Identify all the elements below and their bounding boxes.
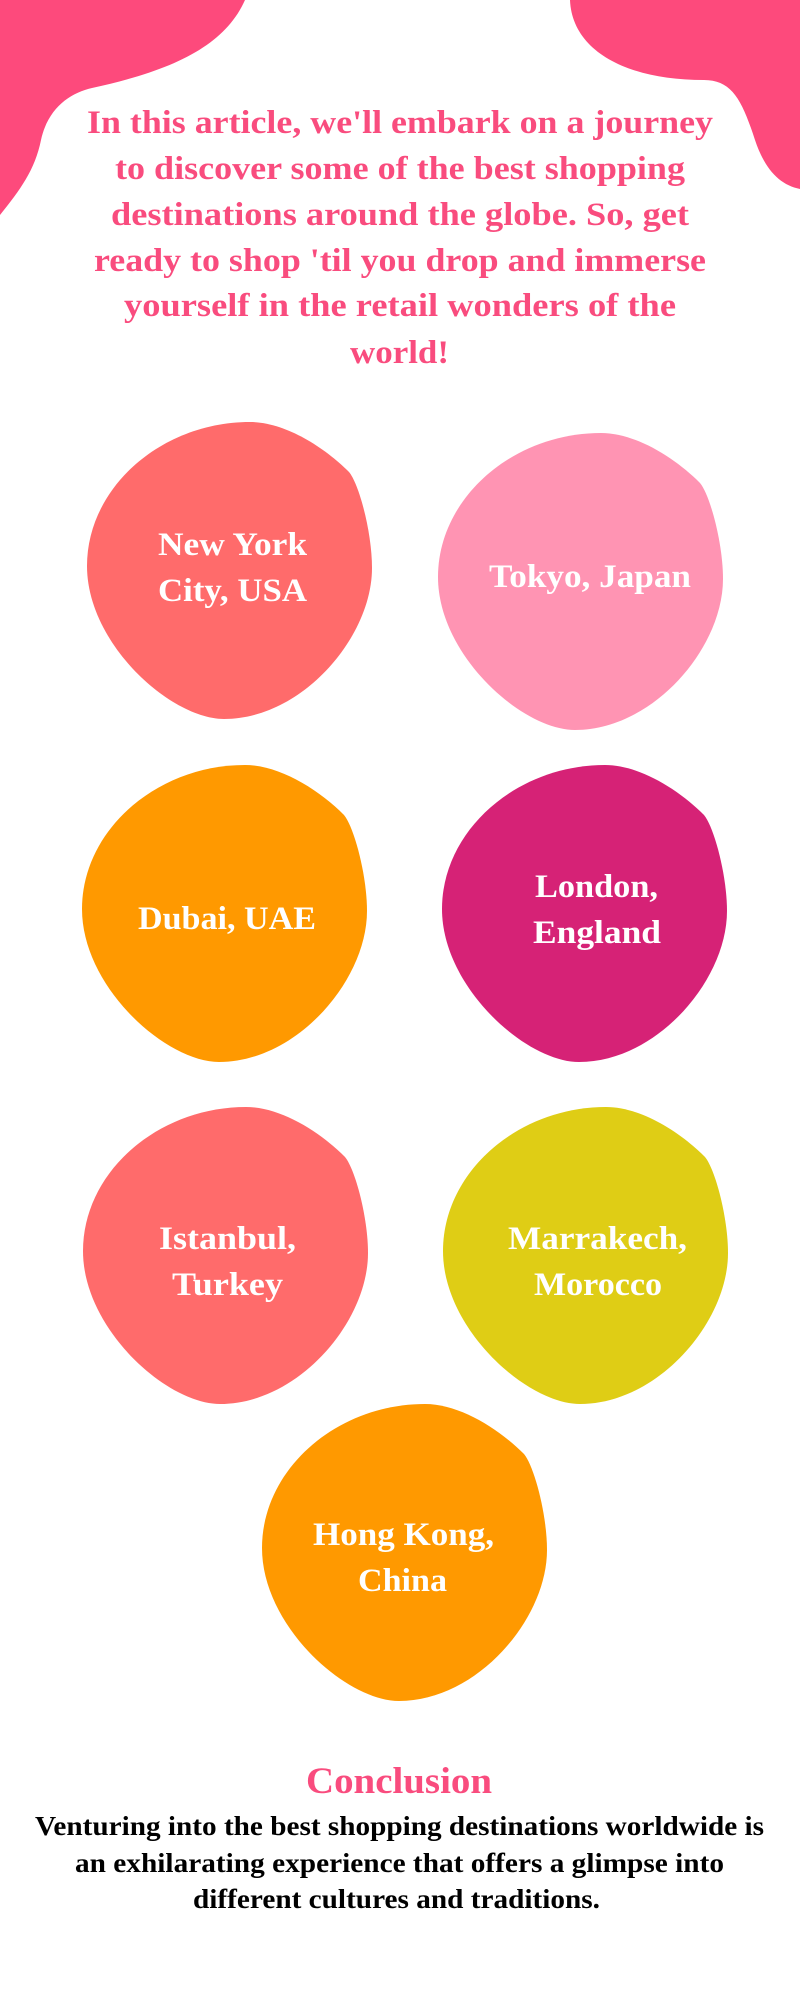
decorative blob: top right corner bbox=[570, 0, 800, 189]
intro paragraph: to discover some of the best shopping bbox=[115, 151, 686, 187]
panel: Hong Kong, China bbox=[262, 1404, 547, 1701]
panel: Istanbul, Turkey bbox=[83, 1107, 368, 1404]
panel: Dubai, UAE: Dubai, UAE bbox=[138, 901, 316, 937]
panel: Marrakech, Morocco: Marrakech, bbox=[508, 1221, 687, 1257]
intro paragraph bbox=[87, 105, 714, 371]
intro paragraph: world! bbox=[350, 335, 449, 371]
panel: Marrakech, Morocco: Morocco bbox=[534, 1267, 662, 1303]
intro paragraph: ready to shop 'til you drop and immerse bbox=[94, 243, 706, 279]
decorative blob: top left corner bbox=[0, 0, 245, 215]
intro paragraph: yourself in the retail wonders of the bbox=[124, 288, 676, 324]
panel: New York City, USA: City, USA bbox=[158, 573, 307, 609]
panel: Hong Kong, China: Hong Kong, bbox=[313, 1517, 494, 1553]
panel: Istanbul, Turkey: Turkey bbox=[172, 1267, 284, 1303]
conclusion text block: Venturing into the best shopping destinations worldwide is bbox=[35, 1811, 764, 1841]
intro paragraph: destinations around the globe. So, get bbox=[111, 197, 689, 233]
panel: London, England: England bbox=[533, 915, 661, 951]
panel: New York City, USA: New York bbox=[158, 527, 308, 563]
panel: London, England: London, bbox=[535, 869, 658, 905]
panel: Istanbul, Turkey: Istanbul, bbox=[159, 1221, 296, 1257]
intro paragraph: In this article, we'll embark on a journey bbox=[87, 105, 714, 141]
panel: Tokyo, Japan: Tokyo, Japan bbox=[489, 559, 691, 595]
conclusion text block: an exhilarating experience that offers a glimpse into bbox=[75, 1848, 724, 1878]
heading: Conclusion: Conclusion bbox=[306, 1761, 492, 1802]
panel: London, England bbox=[442, 765, 727, 1062]
panel: New York City, USA bbox=[87, 422, 372, 719]
panel: Hong Kong, China: China bbox=[358, 1563, 447, 1599]
conclusion text block bbox=[35, 1811, 764, 1914]
panel: Tokyo, Japan bbox=[438, 433, 723, 730]
panel: Dubai, UAE bbox=[82, 765, 367, 1062]
conclusion text block: different cultures and traditions. bbox=[193, 1884, 600, 1914]
panel: Marrakech, Morocco bbox=[443, 1107, 728, 1404]
